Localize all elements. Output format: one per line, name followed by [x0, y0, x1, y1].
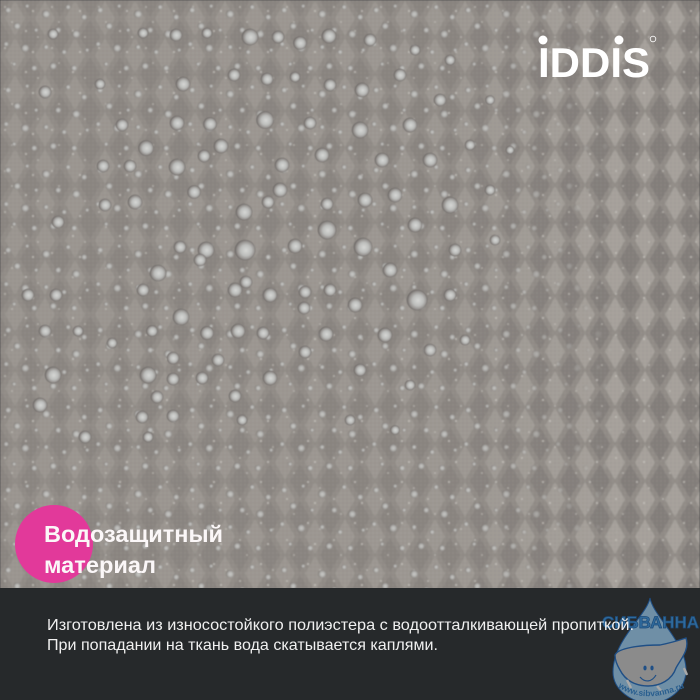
watermark: СИБВАННА drop with bathtub: [602, 598, 699, 700]
description text: Изготовлена из износостойкого полиэстера с водоотталкивающей пропиткой.: [47, 617, 634, 634]
dark caption band: [0, 588, 700, 700]
watermark url: www.sibvanna.ru: [619, 683, 684, 696]
water droplets on fabric: [22, 28, 514, 443]
heading: Водозащитный материал: Водозащитный: [44, 521, 223, 547]
icon: smiling bathtub: [615, 638, 687, 692]
logo: iDDiS: IDDIS: [538, 39, 650, 86]
pink accent circle: [15, 505, 93, 583]
icon: water drop: [613, 598, 686, 700]
heading: Водозащитный материал: материал: [44, 552, 156, 578]
description text: При попадании на ткань вода скатывается каплями.: [47, 637, 438, 654]
watermark name: СИБВАННА: [602, 613, 699, 632]
